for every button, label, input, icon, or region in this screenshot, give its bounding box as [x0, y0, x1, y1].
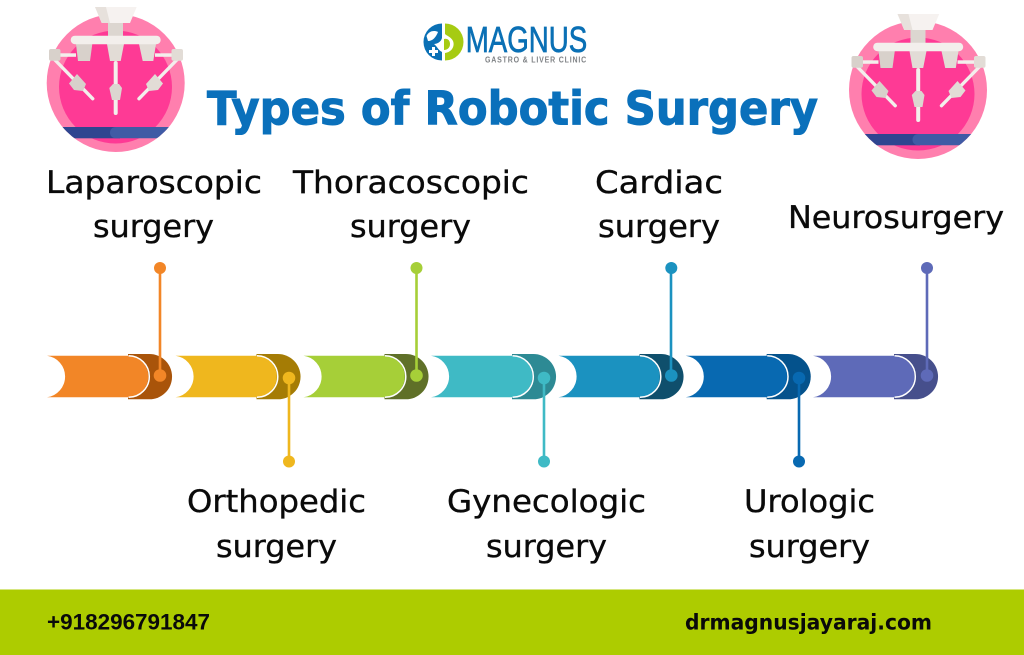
logo wordmark: MAGNUS [466, 19, 587, 60]
label: Gynecologic surgery: surgery [486, 529, 607, 565]
label: Gynecologic surgery [447, 484, 646, 565]
connector: thoracoscopic [410, 262, 423, 382]
logo emblem [424, 24, 464, 60]
label: Cardiac surgery [595, 165, 723, 245]
label: Cardiac surgery: surgery [598, 209, 720, 245]
label: Laparoscopic surgery: Laparoscopic [46, 165, 262, 201]
connector: urologic [793, 372, 805, 468]
segment: teal, gynecologic [431, 354, 556, 399]
segment: dark blue, urologic [686, 354, 811, 399]
connector: neurosurgery [921, 262, 933, 382]
label: Orthopedic surgery: surgery [216, 529, 337, 565]
segment: green, thoracoscopic [304, 354, 429, 399]
segment: orange, laparoscopic [47, 354, 172, 399]
connector: gynecologic [538, 372, 550, 468]
label: Gynecologic surgery: Gynecologic [447, 484, 646, 520]
icon: robotic surgery arms, right [849, 14, 987, 159]
label: Laparoscopic surgery [46, 165, 262, 245]
label: Orthopedic surgery [187, 484, 366, 565]
label: Urologic surgery: surgery [749, 529, 870, 565]
title: Types of Robotic Surgery [207, 82, 818, 136]
connector: orthopedic [283, 372, 295, 468]
logo: Magnus Gastro and Liver Clinic [424, 19, 587, 64]
footer band [0, 590, 1024, 655]
label: Cardiac surgery: Cardiac [595, 165, 723, 201]
footer phone: +918296791847 [47, 609, 210, 634]
icon: robotic surgery arms, left [46, 7, 185, 152]
timeline [47, 354, 938, 399]
connector: laparoscopic [154, 262, 166, 382]
label: Thoracoscopic surgery [292, 165, 529, 245]
footer website: drmagnusjayaraj.com [685, 610, 932, 634]
label: Thoracoscopic surgery: Thoracoscopic [292, 165, 529, 201]
label: Urologic surgery [744, 484, 875, 565]
logo tagline: GASTRO & LIVER CLINIC [485, 54, 587, 64]
label: Thoracoscopic surgery: surgery [350, 209, 471, 245]
label: Neurosurgery: Neurosurgery [788, 200, 1004, 236]
label: Urologic surgery: Urologic [744, 484, 875, 520]
segment: indigo, neurosurgery [813, 354, 938, 399]
segment: yellow, orthopedic [176, 354, 301, 399]
label: Orthopedic surgery: Orthopedic [187, 484, 366, 520]
segment: blue, cardiac [558, 354, 684, 399]
label: Laparoscopic surgery: surgery [93, 209, 214, 245]
connector: cardiac [665, 262, 678, 382]
